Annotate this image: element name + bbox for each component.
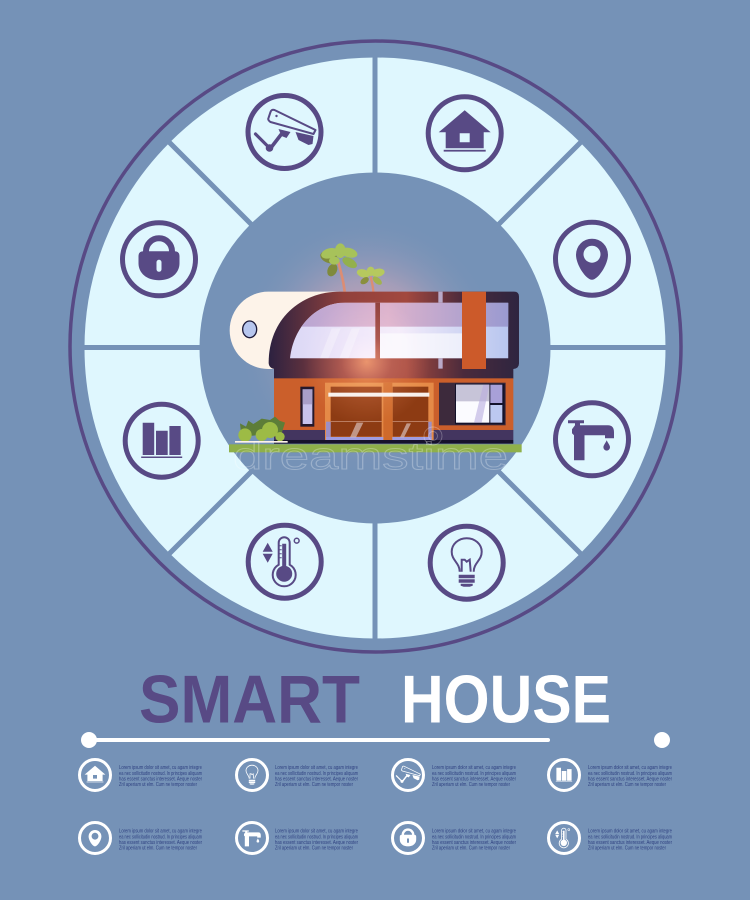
legend item: home: Zril aperiam ut elm. Cum ne tempor noster	[119, 782, 197, 788]
legend item: home: ea nec sollicitudin nostrud. In principes aliquam	[119, 771, 202, 777]
legend item: camera: ea nec sollicitudin nostrud. In principes aliquam	[432, 771, 516, 777]
legend item: chart: Lorem ipsum dolor sit amet, cu agam integre	[588, 765, 672, 771]
legend item: home: Lorem ipsum dolor sit amet, cu agam integre	[119, 765, 202, 771]
icon: padlock	[122, 223, 196, 296]
legend item: thermometer: Lorem ipsum dolor sit amet, cu agam integre	[588, 828, 672, 834]
icon: home	[428, 97, 501, 170]
legend item: bulb: Lorem ipsum dolor sit amet, cu agam integre	[275, 765, 358, 771]
legend item: chart	[548, 760, 672, 790]
glass doors	[325, 383, 434, 440]
panoramic window	[287, 303, 510, 359]
outer ring	[70, 41, 681, 652]
legend item: chart: Zril aperiam ut elm. Cum ne tempor noster	[588, 782, 666, 788]
legend item: tap	[236, 822, 358, 854]
circular wheel diagram	[70, 41, 681, 652]
icon: light bulb	[430, 526, 503, 599]
legend item: bulb: has essent sanctus interesset. Aeque noster	[275, 776, 358, 782]
cream rear volume	[230, 292, 353, 369]
legend item: bulb	[236, 760, 358, 790]
legend item: tap: Zril aperiam ut elm. Cum ne tempor noster	[275, 846, 353, 852]
legend item: camera: Lorem ipsum dolor sit amet, cu agam integre	[432, 765, 516, 771]
legend item: bulb: ea nec sollicitudin nostrud. In principes aliquam	[275, 771, 358, 777]
legend item: chart: ea nec sollicitudin nostrud. In principes aliquam	[588, 771, 672, 777]
legend item: tap: Lorem ipsum dolor sit amet, cu agam integre	[275, 828, 358, 834]
glow behind house	[238, 215, 498, 475]
legend item: pin: Lorem ipsum dolor sit amet, cu agam integre	[119, 828, 202, 834]
legend item: camera: Zril aperiam ut elm. Cum ne tempor noster	[432, 782, 510, 788]
icon: bar chart	[125, 404, 198, 477]
roof gap details	[438, 292, 443, 369]
legend item: tap: has essent sanctus interesset. Aeque noster	[275, 840, 358, 846]
legend item: pin: has essent sanctus interesset. Aeque noster	[119, 840, 202, 846]
legend item: pin: ea nec sollicitudin nostrud. In principes aliquam	[119, 834, 202, 840]
legend item: lock	[392, 822, 516, 854]
legend grid	[80, 760, 672, 854]
title	[139, 662, 611, 738]
icon: water tap	[556, 403, 628, 476]
legend item: tap: ea nec sollicitudin nostrud. In principes aliquam	[275, 834, 358, 840]
legend item: lock: ea nec sollicitudin nostrud. In principes aliquam	[432, 834, 516, 840]
legend item: camera	[392, 760, 516, 790]
ground floor	[274, 367, 513, 444]
bushes	[235, 417, 288, 443]
legend item: lock: Zril aperiam ut elm. Cum ne tempor noster	[432, 846, 510, 852]
palm trees	[319, 243, 385, 293]
legend item: thermometer: ea nec sollicitudin nostrud. In principes aliquam	[588, 834, 672, 840]
legend item: thermometer: has essent sanctus interesset. Aeque noster	[588, 840, 672, 846]
legend item: lock: has essent sanctus interesset. Aeque noster	[432, 840, 516, 846]
slider rule	[81, 732, 670, 748]
legend item: thermometer: Zril aperiam ut elm. Cum ne tempor noster	[588, 846, 666, 852]
title word: house: HOUSE	[401, 662, 611, 738]
legend item: camera: has essent sanctus interesset. Aeque noster	[432, 776, 516, 782]
icon: security camera	[248, 96, 321, 168]
sun flare on house	[303, 298, 430, 425]
grass	[229, 444, 522, 452]
legend item: pin: Zril aperiam ut elm. Cum ne tempor noster	[119, 846, 197, 852]
house illustration	[229, 243, 522, 452]
icon: thermometer	[248, 525, 321, 598]
watermark: dreamstime	[233, 436, 508, 478]
small side window	[300, 387, 314, 427]
watermark	[233, 427, 508, 478]
legend item: thermometer	[548, 822, 672, 854]
eight light segments	[77, 50, 673, 646]
legend item: bulb: Zril aperiam ut elm. Cum ne tempor noster	[275, 782, 353, 788]
icon: location pin	[556, 222, 628, 295]
title word: smart: SMART	[139, 662, 360, 738]
legend item: home: has essent sanctus interesset. Aeque noster	[119, 776, 202, 782]
legend item: pin	[80, 822, 202, 854]
upper floor shell	[269, 292, 519, 369]
porthole window	[243, 321, 257, 338]
right window	[439, 383, 506, 425]
legend item: chart: has essent sanctus interesset. Aeque noster	[588, 776, 672, 782]
legend item: lock: Lorem ipsum dolor sit amet, cu agam integre	[432, 828, 516, 834]
legend item: home	[80, 760, 202, 790]
orange column	[462, 292, 486, 369]
